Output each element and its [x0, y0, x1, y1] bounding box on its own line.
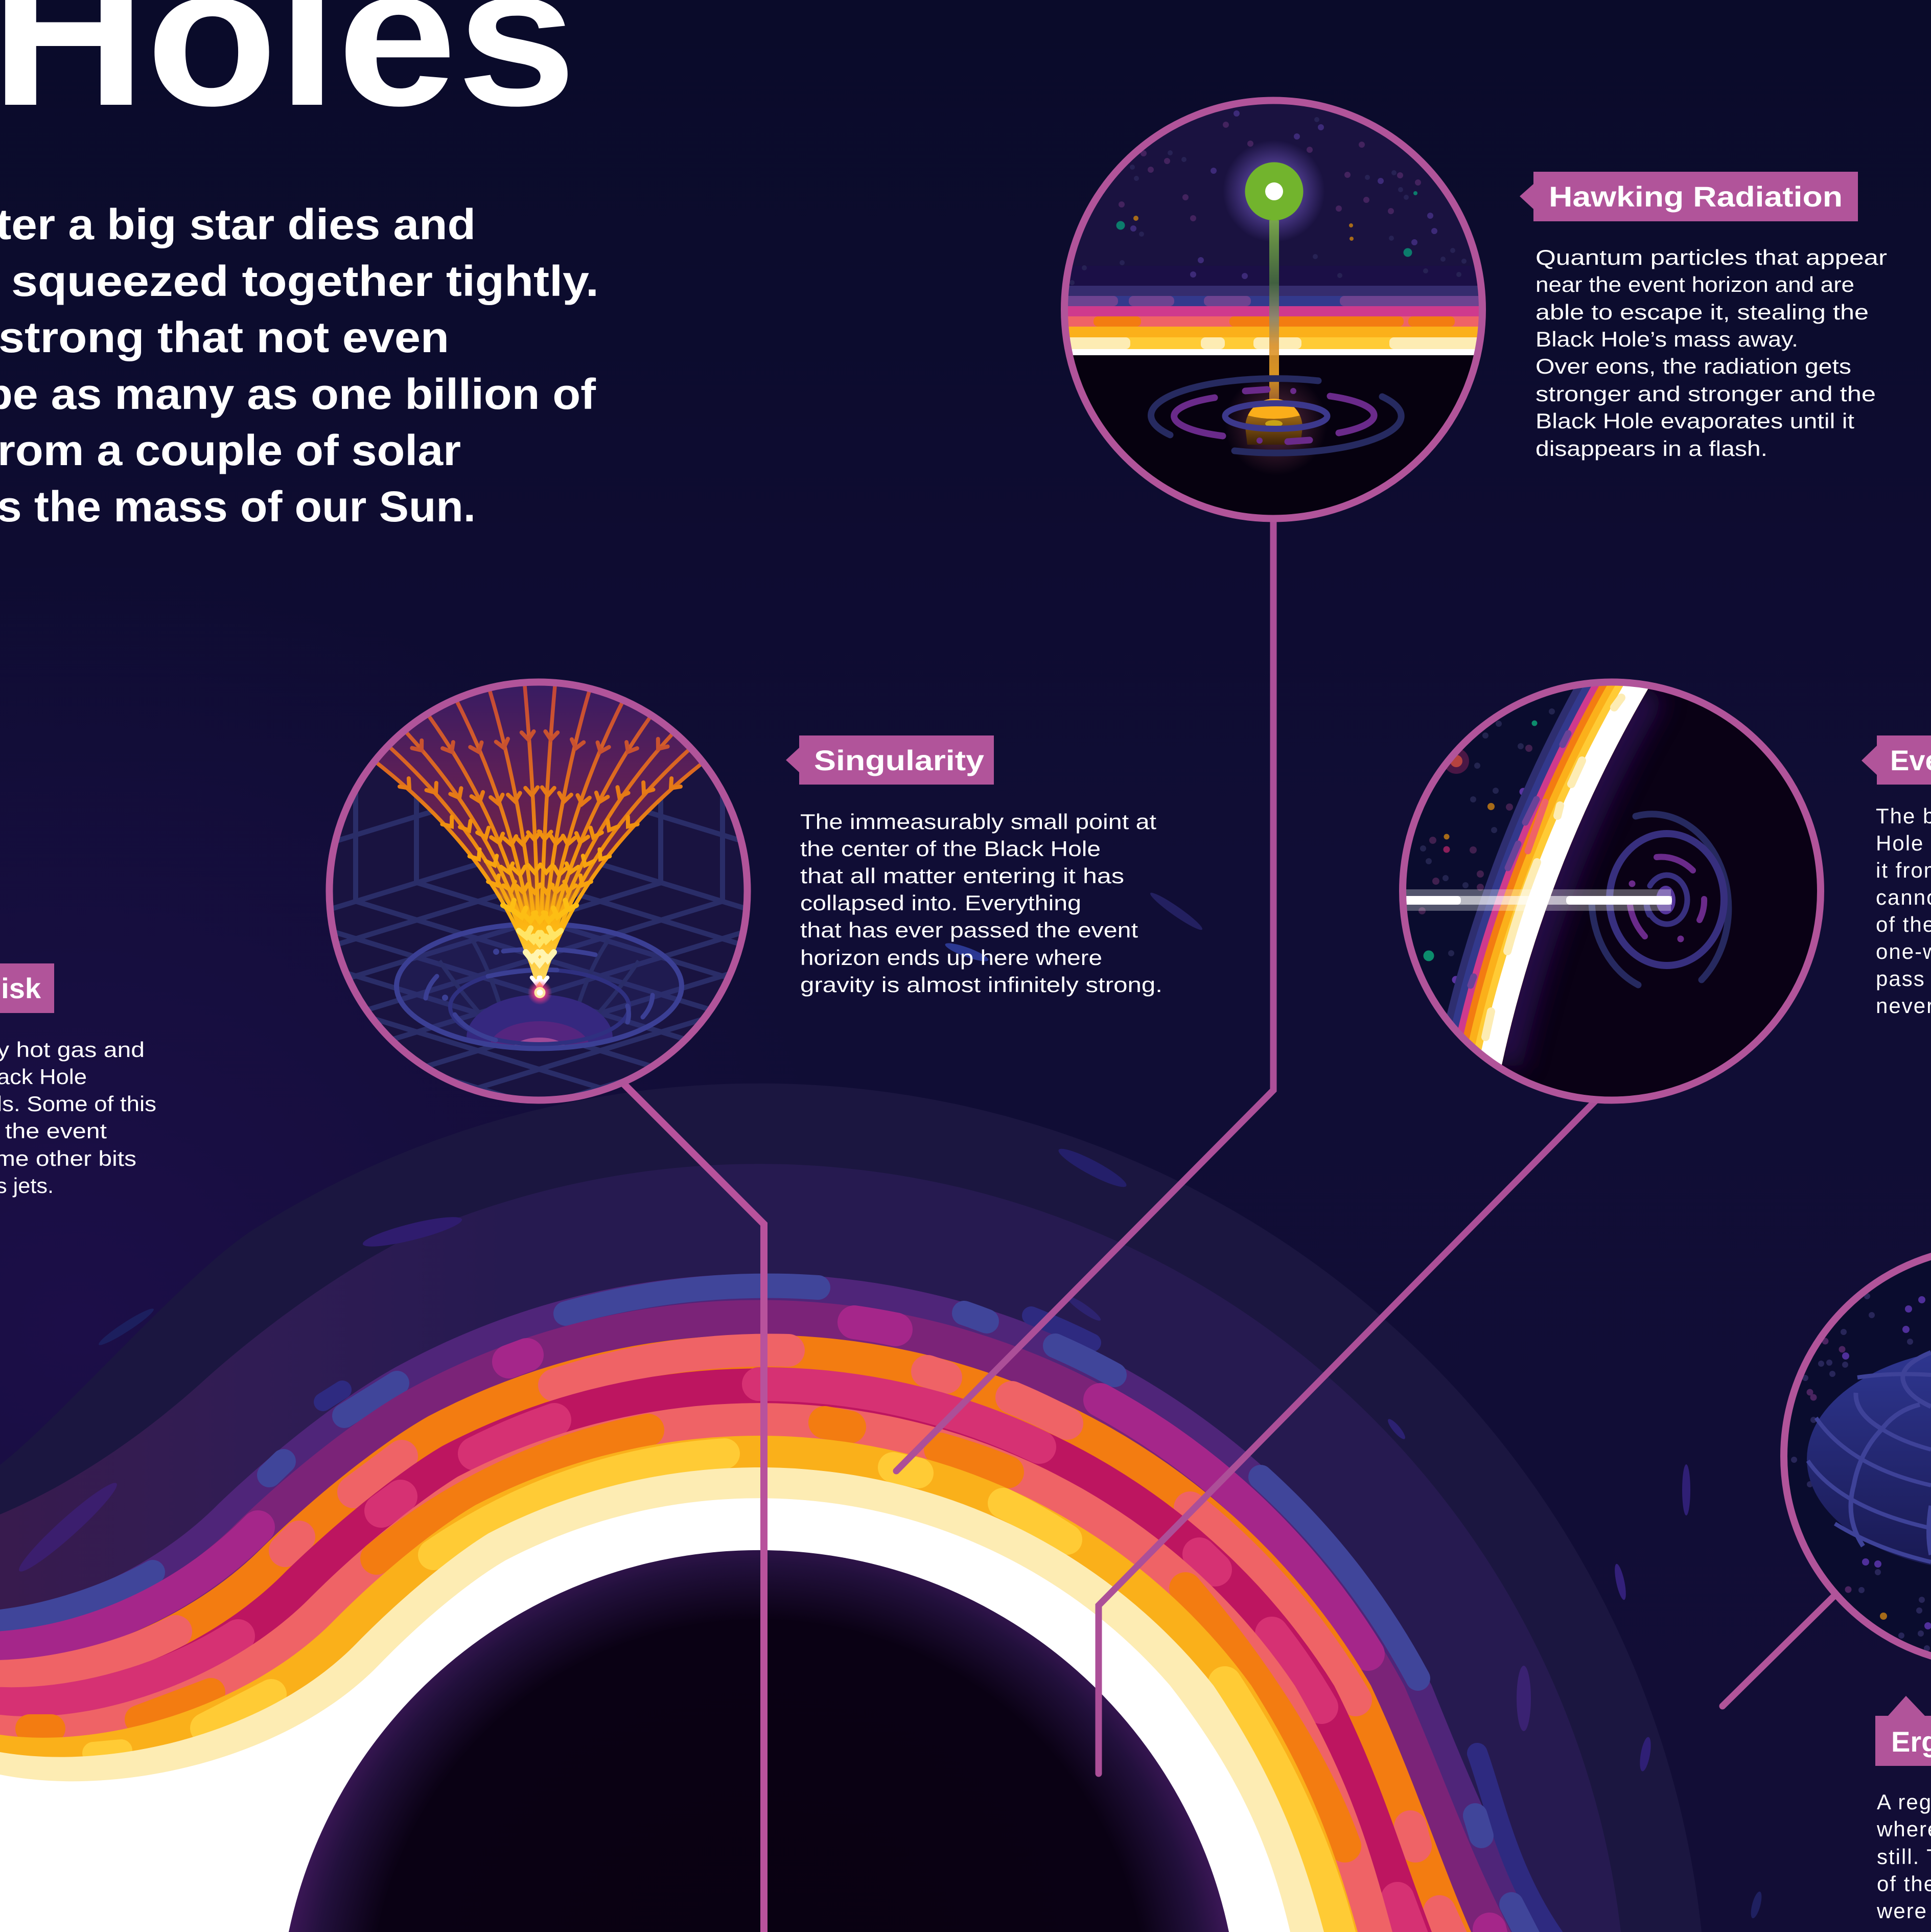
gravity halo inner	[0, 1164, 1621, 1932]
band: orange with coral streaks	[0, 1335, 1471, 1932]
intro text block: ter a big star dies and	[0, 200, 476, 248]
description: Black Hole’s mass away.	[1536, 327, 1798, 351]
description: horizon ends up here where	[800, 946, 1102, 970]
description: pass	[1876, 967, 1925, 991]
band: white hot inner ring	[0, 1498, 1290, 1932]
curved disk bands	[1471, 628, 1686, 1145]
callout: hawking radiation	[1520, 172, 1887, 461]
orbit rings	[1592, 814, 1729, 985]
band: gold with yellow streaks	[0, 1436, 1358, 1932]
funnel glow	[377, 664, 701, 993]
connector: singularity to core	[622, 1082, 764, 1932]
heading: Singularity	[814, 744, 984, 776]
panel: hawking radiation illustration	[1063, 97, 1488, 529]
infalling rays	[377, 686, 701, 992]
connector: event horizon	[1099, 1099, 1597, 1774]
tag	[1520, 172, 1858, 221]
callout: ergosphere	[1875, 1696, 1931, 1923]
callout: accretion disk	[0, 963, 156, 1198]
description: that all matter entering it has	[800, 864, 1124, 888]
band: purple with magenta streaks	[0, 1300, 1511, 1932]
intro text block: be as many as one billion of	[0, 370, 596, 418]
description: gravity is almost infinitely strong.	[800, 973, 1162, 997]
band: coral with orange streaks	[0, 1403, 1392, 1932]
ring	[1064, 100, 1482, 518]
callout: event horizon	[1862, 735, 1931, 1018]
escaping particle beam	[1269, 220, 1279, 399]
black hole side	[1482, 664, 1840, 1124]
tag	[1862, 735, 1931, 785]
ring	[1403, 682, 1821, 1100]
band: cream	[0, 1467, 1324, 1932]
horizontal disk bands	[1063, 286, 1488, 529]
intro text block	[0, 200, 599, 531]
arrowheads	[400, 731, 681, 983]
description: Hole	[1876, 831, 1924, 855]
panel: event horizon illustration	[1390, 628, 1840, 1145]
description	[0, 1038, 156, 1198]
ring	[1784, 1247, 1931, 1665]
band: dark purple with blue streaks	[0, 1274, 1554, 1932]
intro text block: strong that not even	[0, 313, 449, 361]
ring	[329, 682, 747, 1100]
description	[1876, 1790, 1931, 1923]
dark blue streak outside disk	[1477, 1753, 1554, 1932]
heading: Hawking Radiation	[1549, 180, 1843, 213]
description: stronger and stronger and the	[1536, 382, 1876, 406]
description: Over eons, the radiation gets	[1536, 354, 1851, 378]
description: Black Hole evaporates until it	[1536, 409, 1854, 433]
description	[800, 810, 1162, 997]
connector: hawking radiation	[896, 522, 1273, 1471]
description: The immeasurably small point at	[800, 810, 1156, 834]
description: y hot gas and	[0, 1038, 145, 1062]
tag	[0, 963, 54, 1013]
connector: ergosphere	[1723, 1593, 1837, 1706]
jet beam	[1390, 889, 1672, 911]
description: collapsed into. Everything	[800, 891, 1081, 915]
stars	[1072, 113, 1464, 283]
panel: ergosphere illustration	[1778, 1242, 1931, 1671]
black hole body	[289, 1550, 1229, 1932]
sphere grid lines	[1808, 1352, 1931, 1562]
tag	[1875, 1696, 1931, 1766]
ripple rings	[1151, 379, 1401, 453]
tag	[786, 735, 994, 785]
band: crimson with pink streaks	[0, 1368, 1432, 1932]
description	[1536, 245, 1887, 461]
description	[1876, 804, 1931, 1018]
intro text block: squeezed together tightly.	[11, 257, 599, 305]
description: disappears in a flash.	[1536, 436, 1767, 461]
description: were	[1876, 1899, 1927, 1923]
infalling orange particle	[1225, 373, 1327, 475]
warped sphere	[1807, 1347, 1931, 1572]
description: near the event horizon and are	[1536, 272, 1854, 296]
description: the event	[5, 1119, 107, 1143]
green particle	[1245, 162, 1303, 220]
gravity well	[397, 924, 682, 1080]
space debris streaks	[13, 889, 1764, 1919]
escaping particle glow	[1223, 140, 1325, 242]
description: that has ever passed the event	[800, 918, 1138, 942]
description: Quantum particles that appear	[1536, 245, 1887, 269]
stars	[1422, 711, 1552, 980]
spacetime grid	[51, 670, 1028, 1125]
accretion disk bands	[0, 1274, 1554, 1932]
description: the center of the Black Hole	[800, 837, 1101, 861]
intro text block: s the mass of our Sun.	[0, 482, 476, 531]
panel: singularity illustration	[51, 664, 1028, 1125]
description: able to escape it, stealing the	[1536, 300, 1869, 324]
description: ls. Some of this	[0, 1092, 156, 1116]
singularity point	[527, 980, 552, 1005]
intro text block: rom a couple of solar	[0, 426, 461, 474]
gravity halo outer	[0, 1084, 1702, 1932]
stars	[1794, 1296, 1928, 1648]
callout: singularity	[786, 735, 1162, 997]
